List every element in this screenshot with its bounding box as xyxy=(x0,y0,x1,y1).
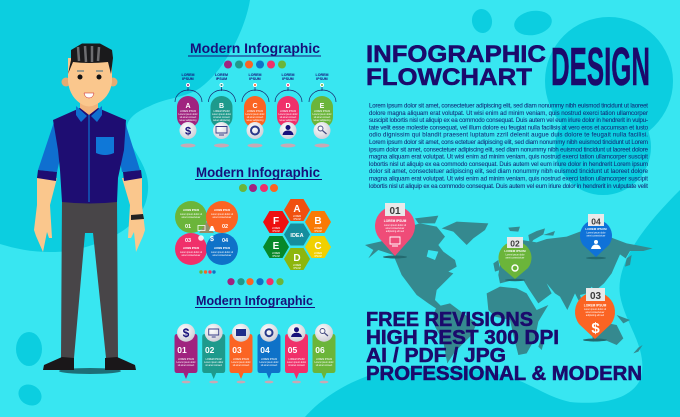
map pin 03: adipiscing elit sed xyxy=(586,314,605,317)
hexagon diagram: LOREM xyxy=(314,228,322,230)
step E: tetuer adipiscing xyxy=(314,119,331,122)
map pin 02: LOREM IPSUM xyxy=(504,249,526,253)
eyes and brows xyxy=(78,74,82,80)
step D: tetuer adipiscing xyxy=(280,119,297,122)
map pin 03: LOREM IPSUM xyxy=(584,304,607,308)
map pin 04: Lorem ipsum dolor xyxy=(586,232,606,234)
step D xyxy=(275,73,302,148)
step A: sit amet consect xyxy=(180,116,197,119)
card 02 xyxy=(202,324,225,383)
shoes xyxy=(43,357,136,370)
card 06: LOREM IPSUM xyxy=(316,359,332,361)
main title xyxy=(366,37,650,97)
hexagon diagram: IPSUM xyxy=(314,256,322,258)
map pin 02 xyxy=(499,237,532,281)
placket xyxy=(88,115,90,202)
step C: LOREM xyxy=(249,73,261,77)
hexagon diagram: C xyxy=(314,241,322,252)
watch xyxy=(131,214,144,220)
four overlapping circles: amet consectetuer xyxy=(213,216,232,219)
feature list: HIGH REST 300 DPI xyxy=(366,327,559,349)
hexagon diagram: LOREM xyxy=(293,265,301,267)
section 2: circles and hexagons xyxy=(175,164,331,274)
card 01: 01 xyxy=(177,345,187,355)
step B: sit amet consect xyxy=(213,116,230,119)
card 06 xyxy=(312,324,336,383)
four overlapping circles: amet consectetuer xyxy=(182,254,201,257)
map pin 01: Lorem ipsum dolor sit xyxy=(384,224,406,227)
body paragraph: odio dignissim qui blandit praesent luptatum zzril delenit augue duis dolore te feugait nulla facilisi. xyxy=(369,132,648,139)
card 03 xyxy=(230,324,252,383)
step E: LOREM IPSUM xyxy=(314,111,330,113)
card 01: Lorem ipsum dolor xyxy=(176,361,196,364)
step E: Lorem ipsum dolor xyxy=(312,113,332,116)
heading: Modern Infographic xyxy=(196,164,320,180)
card 04 xyxy=(258,324,280,383)
body paragraph: lobortis nisl ut aliquip ex ea commodo consequat. Duis autem vel eum iriure dolor in hendrerit Lorem ipsum xyxy=(369,161,648,168)
section 3: six step cards xyxy=(174,278,336,383)
four overlapping circles: 01 xyxy=(185,224,191,230)
card 02: 02 xyxy=(205,345,215,355)
map pin 03: amet consectetuer xyxy=(586,311,605,314)
arms xyxy=(34,178,145,252)
step A: $ xyxy=(185,126,191,138)
body paragraph: ipsum dolor sit amet, consectetuer adipiscing elit, sed diam nonummy nibh euismod tincidunt ut laoreet dolore xyxy=(369,146,649,153)
map pin 03: $ xyxy=(591,320,600,337)
four overlapping circles: 04 xyxy=(222,238,229,244)
step B: tetuer adipiscing xyxy=(213,119,231,122)
step E: E xyxy=(320,103,325,110)
step B: IPSUM xyxy=(216,77,227,81)
body paragraph: Lorem ipsum dolor sit amet, consectetuer adipiscing elit, sed diam nonummy nibh euismod tincidunt ut laoreet xyxy=(369,102,648,110)
four overlapping circles: LOREM IPSUM xyxy=(183,248,199,250)
hexagon diagram: LOREM xyxy=(314,253,322,255)
step E: sit amet consect xyxy=(314,116,331,119)
map pin 03: 03 xyxy=(590,291,601,302)
four overlapping circles: $ xyxy=(210,236,214,243)
card 05: 05 xyxy=(288,345,297,355)
step A xyxy=(175,73,202,148)
card 03: sit amet consect xyxy=(233,364,250,367)
card 01: LOREM IPSUM xyxy=(178,359,194,361)
four overlapping circles: Lorem ipsum dolor sit xyxy=(180,213,202,216)
hexagon diagram: LOREM xyxy=(272,228,280,230)
card 04: sit amet consect xyxy=(261,364,278,367)
hexagon diagram: IPSUM xyxy=(293,219,301,221)
trousers xyxy=(61,198,118,358)
map pin 04: amet consectetuer xyxy=(587,234,606,238)
neck xyxy=(80,98,98,118)
ground shadow xyxy=(59,368,121,374)
hexagon diagram: F xyxy=(273,216,279,227)
hexagon diagram: IDEA xyxy=(290,233,304,239)
card 03: LOREM IPSUM xyxy=(233,359,249,361)
step C: C xyxy=(252,103,258,110)
feature list: FREE REVISIONS xyxy=(366,309,533,331)
hexagon diagram: A xyxy=(293,204,301,215)
card 05: sit amet consect xyxy=(288,364,305,367)
hexagon diagram: LOREM xyxy=(272,253,280,255)
step E: IPSUM xyxy=(316,77,328,81)
map pin 04 xyxy=(580,214,612,259)
colour dots xyxy=(239,184,278,192)
card 02: Lorem ipsum dolor xyxy=(204,361,223,364)
shirt torso xyxy=(53,108,126,204)
four overlapping circles: amet consectetuer xyxy=(213,254,232,257)
map pin 02: amet consectetuer xyxy=(506,256,525,260)
card 06: Lorem ipsum dolor xyxy=(314,361,334,364)
card 04: Lorem ipsum dolor xyxy=(259,361,279,364)
step D: Lorem ipsum dolor xyxy=(278,113,298,116)
body paragraph: suscipit lobortis nisl ut aliquip ex ea commodo consequat. Duis autem vel eum iriure dolor in hendrerit in vulpu- xyxy=(369,117,648,124)
four overlapping circles: 02 xyxy=(222,224,228,230)
map pin 01: 01 xyxy=(389,206,401,217)
map pin 01 xyxy=(375,203,415,258)
map pin 01: adipiscing elit sed xyxy=(386,230,405,233)
step D: LOREM IPSUM xyxy=(280,111,296,113)
section 1: five step infographic xyxy=(175,40,336,148)
small dots xyxy=(199,270,216,274)
body paragraph xyxy=(369,102,649,190)
step B: Lorem ipsum dolor xyxy=(212,113,231,116)
sleeves and cuffs xyxy=(38,122,62,172)
body paragraph: dolore magna aliquam erat volutpat. Ut wisi enim ad minim veniam, quis nostrud exerci tation ullamcorper xyxy=(369,110,648,117)
step A: IPSUM xyxy=(182,77,194,81)
face xyxy=(68,58,112,106)
four overlapping circles: 03 xyxy=(185,238,191,244)
step A: Lorem ipsum dolor xyxy=(178,113,198,116)
card 01: $ xyxy=(183,326,190,340)
mouth xyxy=(84,93,94,98)
feature list: AI / PDF / JPG xyxy=(366,345,506,367)
four overlapping circles: LOREM IPSUM xyxy=(214,210,230,212)
step B xyxy=(208,73,236,148)
step E xyxy=(309,73,336,148)
map pin 01: amet consectetuer xyxy=(386,227,405,230)
map pin 01: LOREM IPSUM xyxy=(384,219,407,223)
world map xyxy=(365,216,653,363)
card 06: sit amet consect xyxy=(316,364,333,367)
step C: tetuer adipiscing xyxy=(247,119,264,122)
map pin 02: 02 xyxy=(510,238,520,248)
card 02: sit amet consect xyxy=(205,364,222,367)
four overlapping circles xyxy=(175,201,238,265)
step B: LOREM IPSUM xyxy=(213,111,230,113)
four overlapping circles: Lorem ipsum dolor sit xyxy=(211,251,233,254)
body paragraph: dolor sit amet, consectetuer adipiscing elit, sed diam nonummy nibh euismod tincidunt ut laoreet dolore xyxy=(369,168,649,175)
body paragraph: magna aliquam erat volutpat. Ut wisi enim ad minim veniam, quis nostrud exerci tation ullamcorper suscipit xyxy=(369,176,648,182)
map pin 04: LOREM IPSUM xyxy=(585,227,607,231)
hexagon diagram: E xyxy=(273,241,280,252)
feature list: PROFESSIONAL & MODERN xyxy=(366,363,642,385)
card 05 xyxy=(285,324,308,383)
hexagon diagram xyxy=(263,199,331,270)
hexagon diagram: B xyxy=(314,216,322,227)
hexagon diagram: IPSUM xyxy=(272,231,280,233)
card 04: LOREM IPSUM xyxy=(261,359,277,361)
step C: Lorem ipsum dolor xyxy=(245,113,265,116)
card 01 xyxy=(174,324,198,383)
map pin 02: Lorem ipsum dolor xyxy=(505,254,525,256)
hexagon diagram: IPSUM xyxy=(314,231,322,233)
body paragraph: Lorem ipsum dolor sit amet, cons ectetuer adipiscing elit, sed diam nonummy nibh euismod tincidunt ut Lorem xyxy=(369,139,648,146)
card 04: 04 xyxy=(260,345,270,355)
ears xyxy=(62,78,70,86)
main title: INFOGRAPHIC xyxy=(366,41,546,68)
hexagon diagram: IPSUM xyxy=(293,268,301,270)
main title: FLOWCHART xyxy=(366,64,532,91)
step B: LOREM xyxy=(215,73,228,77)
step D: D xyxy=(285,103,291,110)
map pin 03 xyxy=(575,288,615,342)
pocket xyxy=(96,137,114,155)
step A: A xyxy=(185,103,191,110)
hexagon diagram: D xyxy=(293,253,301,264)
heading: Modern Infographic xyxy=(190,40,320,56)
step C: IPSUM xyxy=(249,77,261,81)
step A: LOREM xyxy=(182,73,194,77)
four overlapping circles: LOREM IPSUM xyxy=(183,210,199,212)
hair xyxy=(68,44,113,74)
colour dots xyxy=(227,278,284,285)
body paragraph: tate velit esse molestie consequat, vel illum dolore eu feugiat nulla facilisis at vero eros et accumsan et iusto xyxy=(369,124,649,131)
step D: sit amet consect xyxy=(280,116,297,119)
four overlapping circles: Lorem ipsum dolor sit xyxy=(180,251,202,254)
step C: LOREM IPSUM xyxy=(247,111,263,113)
card 03: 03 xyxy=(232,345,242,355)
body paragraph: magna aliquam erat volutpat. Ut wisi enim ad minim veniam, quis nostrud exerci tation ullamcorper suscipit xyxy=(369,154,648,161)
map pin 03: Lorem ipsum dolor sit xyxy=(584,308,606,311)
hexagon diagram: LOREM xyxy=(293,216,301,218)
character illustration: man in shirt xyxy=(34,44,145,374)
step C xyxy=(242,73,269,148)
feature list xyxy=(366,309,642,385)
step A: LOREM IPSUM xyxy=(180,111,196,113)
four overlapping circles: amet consectetuer xyxy=(182,216,201,219)
map pin 04: 04 xyxy=(591,216,601,226)
heading: Modern Infographic xyxy=(196,293,313,308)
step D: LOREM xyxy=(282,73,294,77)
card 01: sit amet consect xyxy=(178,364,195,367)
card 02: LOREM IPSUM xyxy=(206,359,222,361)
hexagon diagram: IPSUM xyxy=(272,256,280,258)
colour dots xyxy=(224,60,286,68)
card 03: Lorem ipsum dolor xyxy=(231,361,251,364)
step E: LOREM xyxy=(316,73,328,77)
card 06: 06 xyxy=(315,345,325,355)
body paragraph: lobortis nisl ut aliquip ex ea commodo consequat. Duis autem vel eum iriure dolor in hendrerit in vulputate velit xyxy=(369,183,648,190)
step B: B xyxy=(219,103,224,110)
step C: sit amet consect xyxy=(247,116,264,119)
four overlapping circles: LOREM IPSUM xyxy=(214,248,230,250)
card 05: Lorem ipsum dolor xyxy=(287,361,306,364)
step A: tetuer adipiscing xyxy=(180,119,197,122)
collar xyxy=(76,106,102,122)
four overlapping circles: Lorem ipsum dolor sit xyxy=(211,213,233,216)
card 05: LOREM IPSUM xyxy=(288,359,305,361)
step D: IPSUM xyxy=(282,77,294,81)
